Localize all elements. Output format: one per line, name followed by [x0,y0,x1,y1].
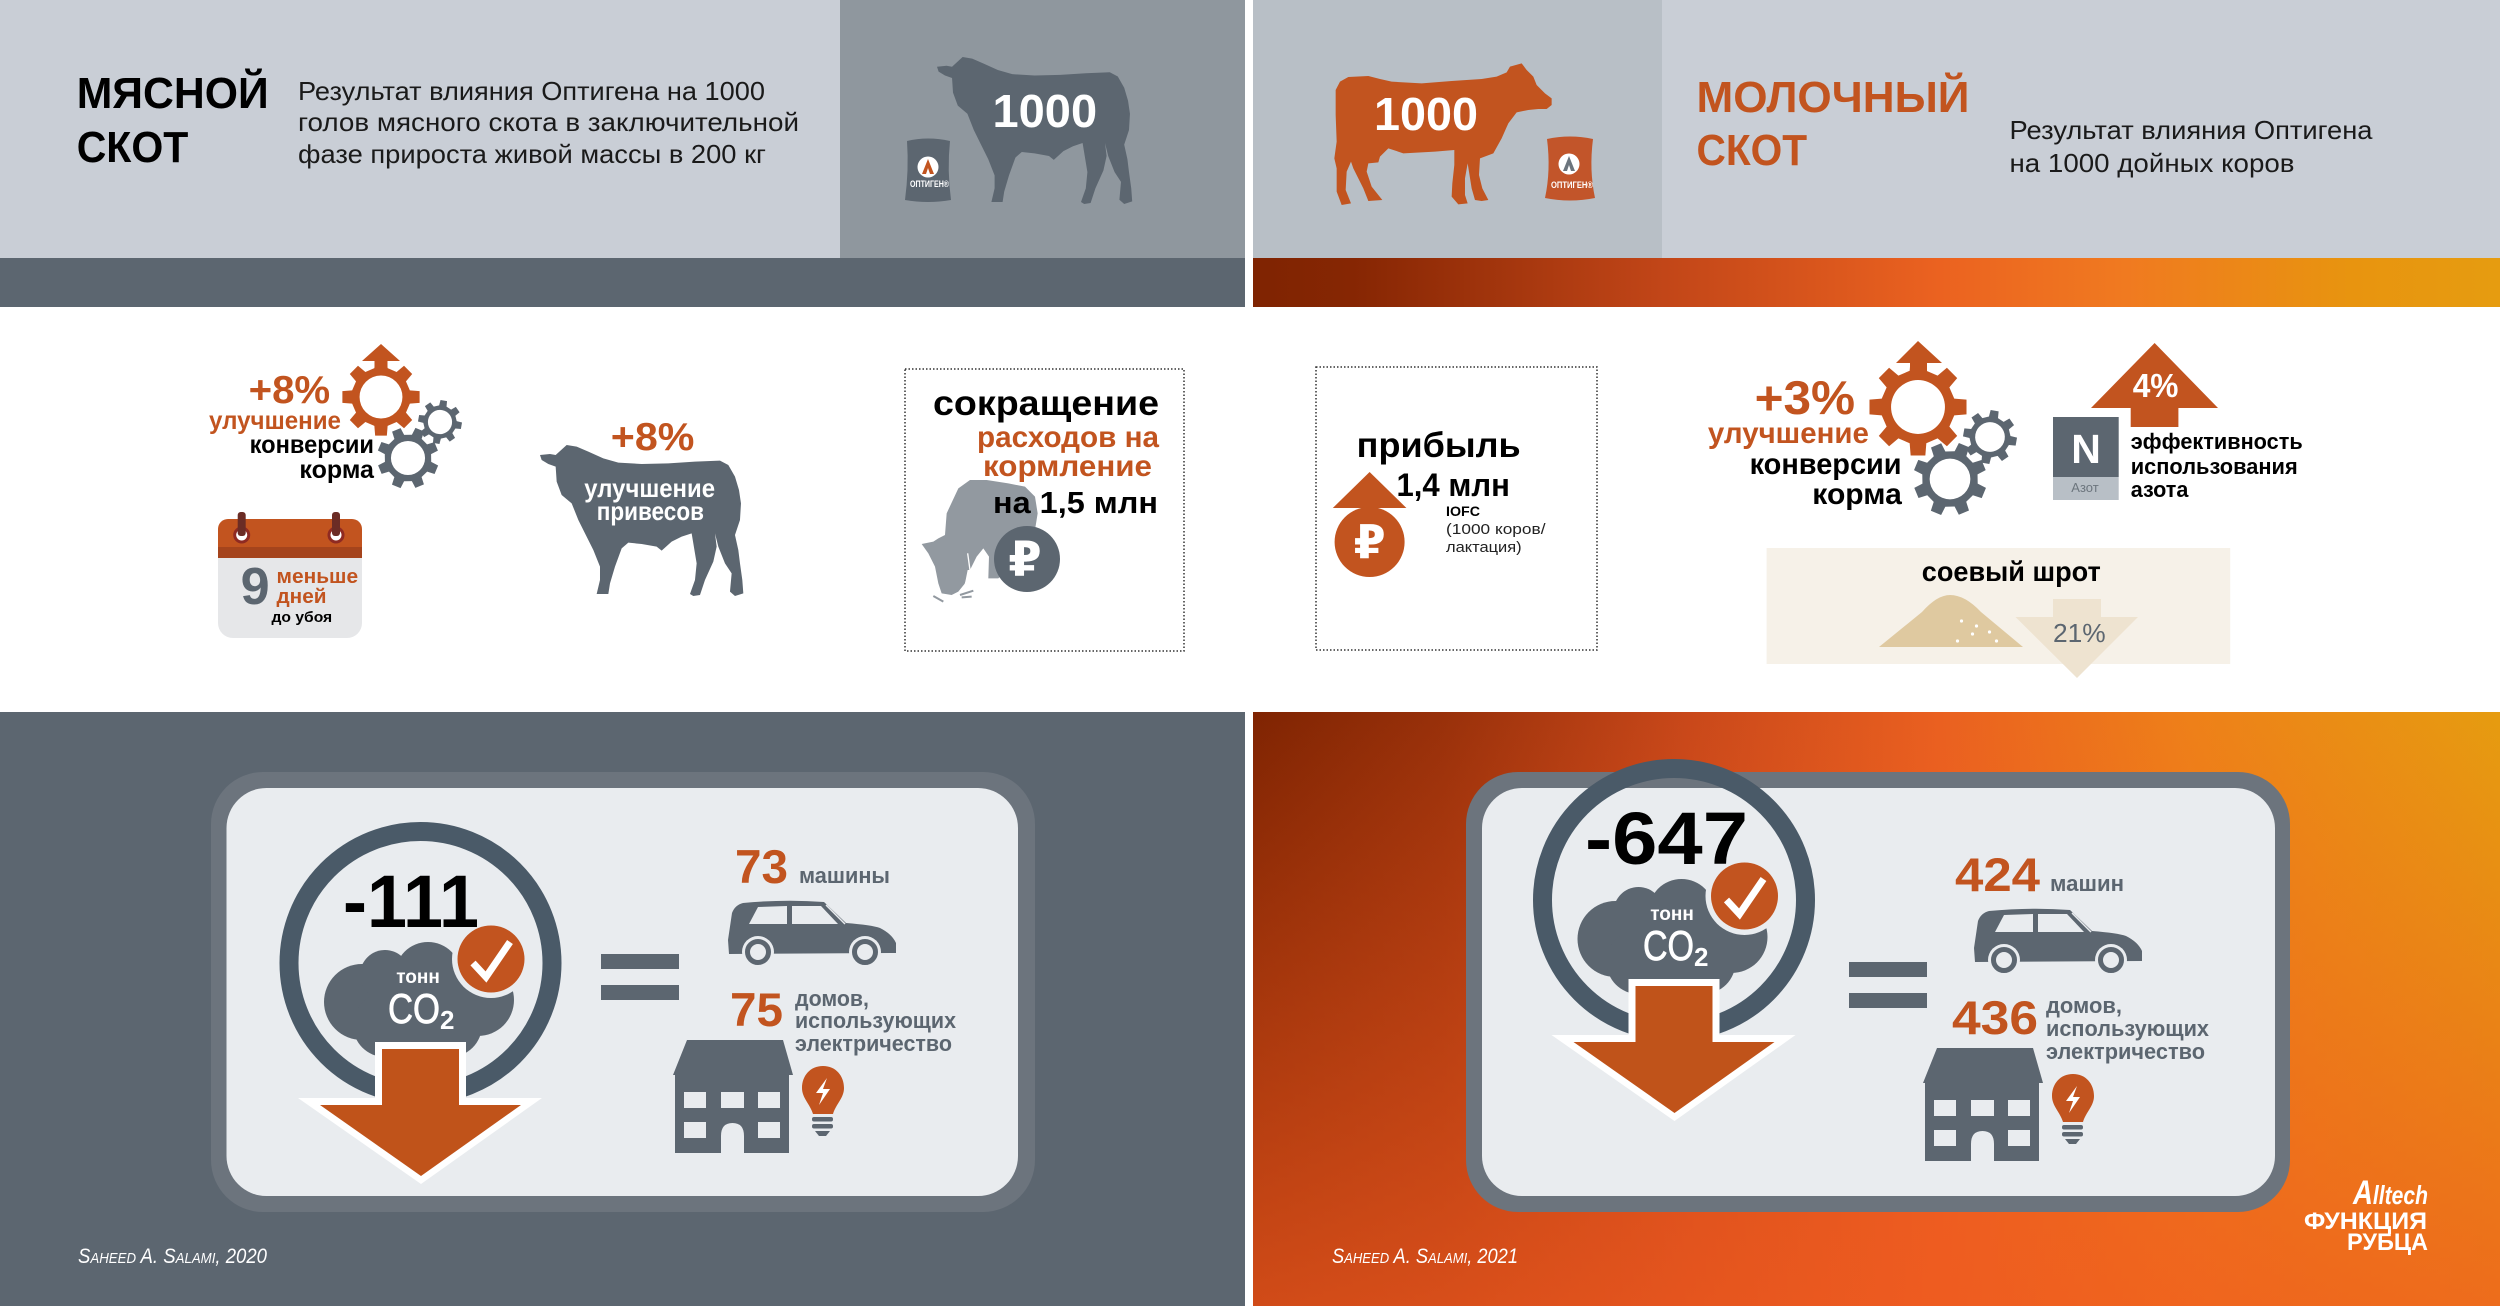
panel: profit IOFC: (1000 коров/ [1446,521,1546,538]
icon: CO2 reduction dairy [1542,768,1806,1121]
text block: 436 homes: использующих [2046,1016,2210,1041]
panel: soybean meal: 21% [2053,618,2106,648]
icon: house beef [673,1040,793,1153]
icon: Optigen bag grey [905,138,951,202]
icon: equals beef [601,954,679,1000]
panel: profit IOFC: лактация) [1446,539,1522,556]
text block: +8% feed conversion: конверсии [250,431,374,459]
icon: CO2 reduction beef: тонн [396,967,440,988]
panel: feed cost reduction: кормление [983,450,1152,483]
title: beef cattle: СКОТ [77,123,188,172]
text block: nitrogen efficiency: эффективность [2131,429,2303,454]
panel: soybean meal: соевый шрот [1922,556,2101,587]
icon: house dairy [1923,1048,2043,1161]
icon: equals dairy [1849,962,1927,1008]
logo: Alltech rumen function: ФУНКЦИЯ [2304,1208,2427,1235]
icon: bull weight gain: привесов [597,496,704,526]
text block: beef description [298,76,799,169]
panel: profit IOFC: прибыль [1357,426,1521,465]
text block: beef description: фазе прироста живой массы в 200 кг [298,139,766,169]
text block: 75 homes [730,983,957,1056]
text block: 436 homes [1952,991,2210,1064]
text block: 424 cars: машин [2050,871,2124,896]
title: dairy cattle: СКОТ [1696,126,1807,175]
icon: CO2 reduction beef: CO [388,985,440,1032]
panel: profit IOFC [1316,367,1597,650]
panel: profit IOFC: ₽ [1354,516,1386,568]
text block: 75 homes: использующих [795,1008,957,1033]
icon: dairy cow with 1000 [1334,63,1552,205]
icon: bull weight gain [540,416,743,596]
text block: beef description: голов мясного скота в заключительной [298,107,799,137]
title: beef cattle: МЯСНОЙ [77,67,269,118]
text block: +3% feed conversion: +3% [1755,371,1855,424]
icon: gears dairy [1869,341,2021,527]
citation dairy: Saheed A. Salami, 2021 [1332,1245,1518,1268]
icon: CO2 reduction dairy: -647 [1585,797,1748,880]
panel: bottom beef background [0,712,1245,1306]
icon: car beef [728,901,896,968]
icon: Optigen bag orange: ОПТИГЕН® [1551,180,1593,190]
panel: feed cost reduction: на 1,5 млн [993,485,1158,520]
icon: CO2 reduction beef: -111 [343,860,479,943]
icon: calendar 9 fewer days: до убоя [272,609,332,626]
icon: nitrogen element tile: Азот [2071,480,2099,495]
text block: +8% feed conversion: улучшение [209,407,341,435]
panel: feed cost reduction: ₽ [1008,534,1042,587]
text block: +8% feed conversion: корма [299,456,375,484]
panel: header dairy background [1253,0,2500,307]
icon: CO2 reduction beef [289,832,552,1184]
icon: Optigen bag grey: ОПТИГЕН® [910,179,949,189]
icon: calendar 9 fewer days: дней [276,586,326,608]
icon: Optigen bag orange [1545,136,1595,200]
title: beef cattle [77,67,269,172]
title: dairy cattle: МОЛОЧНЫЙ [1696,71,1970,122]
icon: car dairy [1974,909,2142,976]
text block: 73 cars: машины [799,863,890,888]
text block: 436 homes: 436 [1952,991,2038,1044]
text block: 75 homes: домов, [795,986,869,1011]
icon: CO2 reduction beef: 2 [440,1005,454,1035]
icon: bull with 1000: 1000 [992,85,1097,137]
logo: Alltech rumen function: Alltech [2352,1174,2428,1212]
panel: dairy CO2 card [1466,772,2290,1212]
text block: +3% feed conversion: конверсии [1750,448,1902,481]
panel: bottom dairy background [1253,712,2500,1306]
text block: 424 cars: 424 [1955,848,2040,901]
icon: bull weight gain: +8% [611,416,694,459]
icon: gears beef [342,344,465,498]
icon: bulb beef [802,1066,844,1136]
icon: bulb dairy [2052,1074,2094,1144]
icon: dairy cow with 1000: 1000 [1374,88,1478,140]
text block: +8% feed conversion [209,369,375,484]
logo: Alltech rumen function [2304,1174,2428,1256]
logo: Alltech rumen function: РУБЦА [2347,1229,2428,1256]
panel: soybean meal [1767,548,2230,678]
text block: nitrogen efficiency: использования [2131,454,2298,479]
icon: nitrogen element tile [2053,417,2119,500]
icon: CO2 reduction dairy: CO [1643,922,1694,969]
panel: profit IOFC: IOFC [1446,503,1480,519]
panel: header beef background [0,0,1245,307]
panel: feed cost reduction: расходов на [977,421,1159,454]
text block: 75 homes: электричество [795,1031,952,1056]
text block: +3% feed conversion: улучшение [1708,417,1869,450]
text block: +3% feed conversion [1708,371,1902,511]
panel: feed cost reduction: сокращение [933,384,1159,423]
text block: nitrogen efficiency [2131,429,2303,502]
text block: 75 homes: 75 [730,983,783,1036]
panel: beef CO2 card [211,772,1035,1212]
text block: +8% feed conversion: +8% [249,369,330,412]
title: dairy cattle [1696,71,1970,175]
icon: bull weight gain: улучшение [584,473,715,503]
icon: CO2 reduction dairy: 2 [1694,942,1708,972]
text block: 436 homes: домов, [2046,993,2122,1018]
text block: dairy description [2010,115,2373,178]
panel: feed cost reduction [905,369,1184,651]
panel: profit IOFC: 1,4 млн [1396,467,1510,503]
citation beef: Saheed A. Salami, 2020 [78,1245,267,1268]
text block: dairy description: на 1000 дойных коров [2010,148,2294,178]
icon: calendar 9 fewer days: меньше [276,566,358,588]
icon: nitrogen element tile: N [2071,426,2101,472]
text block: nitrogen efficiency: азота [2131,477,2189,502]
text block: 424 cars [1955,848,2124,901]
text block: dairy description: Результат влияния Оптигена [2010,115,2373,145]
text block: 436 homes: электричество [2046,1039,2205,1064]
icon: arrow 4%: 4% [2133,367,2178,404]
text block: 73 cars: 73 [735,840,788,893]
icon: bull with 1000 [937,57,1132,204]
icon: arrow 4% [2091,343,2218,427]
icon: calendar 9 fewer days [218,512,362,638]
text block: beef description: Результат влияния Оптигена на 1000 [298,76,765,106]
icon: calendar 9 fewer days: 9 [241,558,270,616]
text block: +3% feed conversion: корма [1812,478,1902,511]
icon: CO2 reduction dairy: тонн [1650,904,1694,925]
text block: 73 cars [735,840,890,893]
